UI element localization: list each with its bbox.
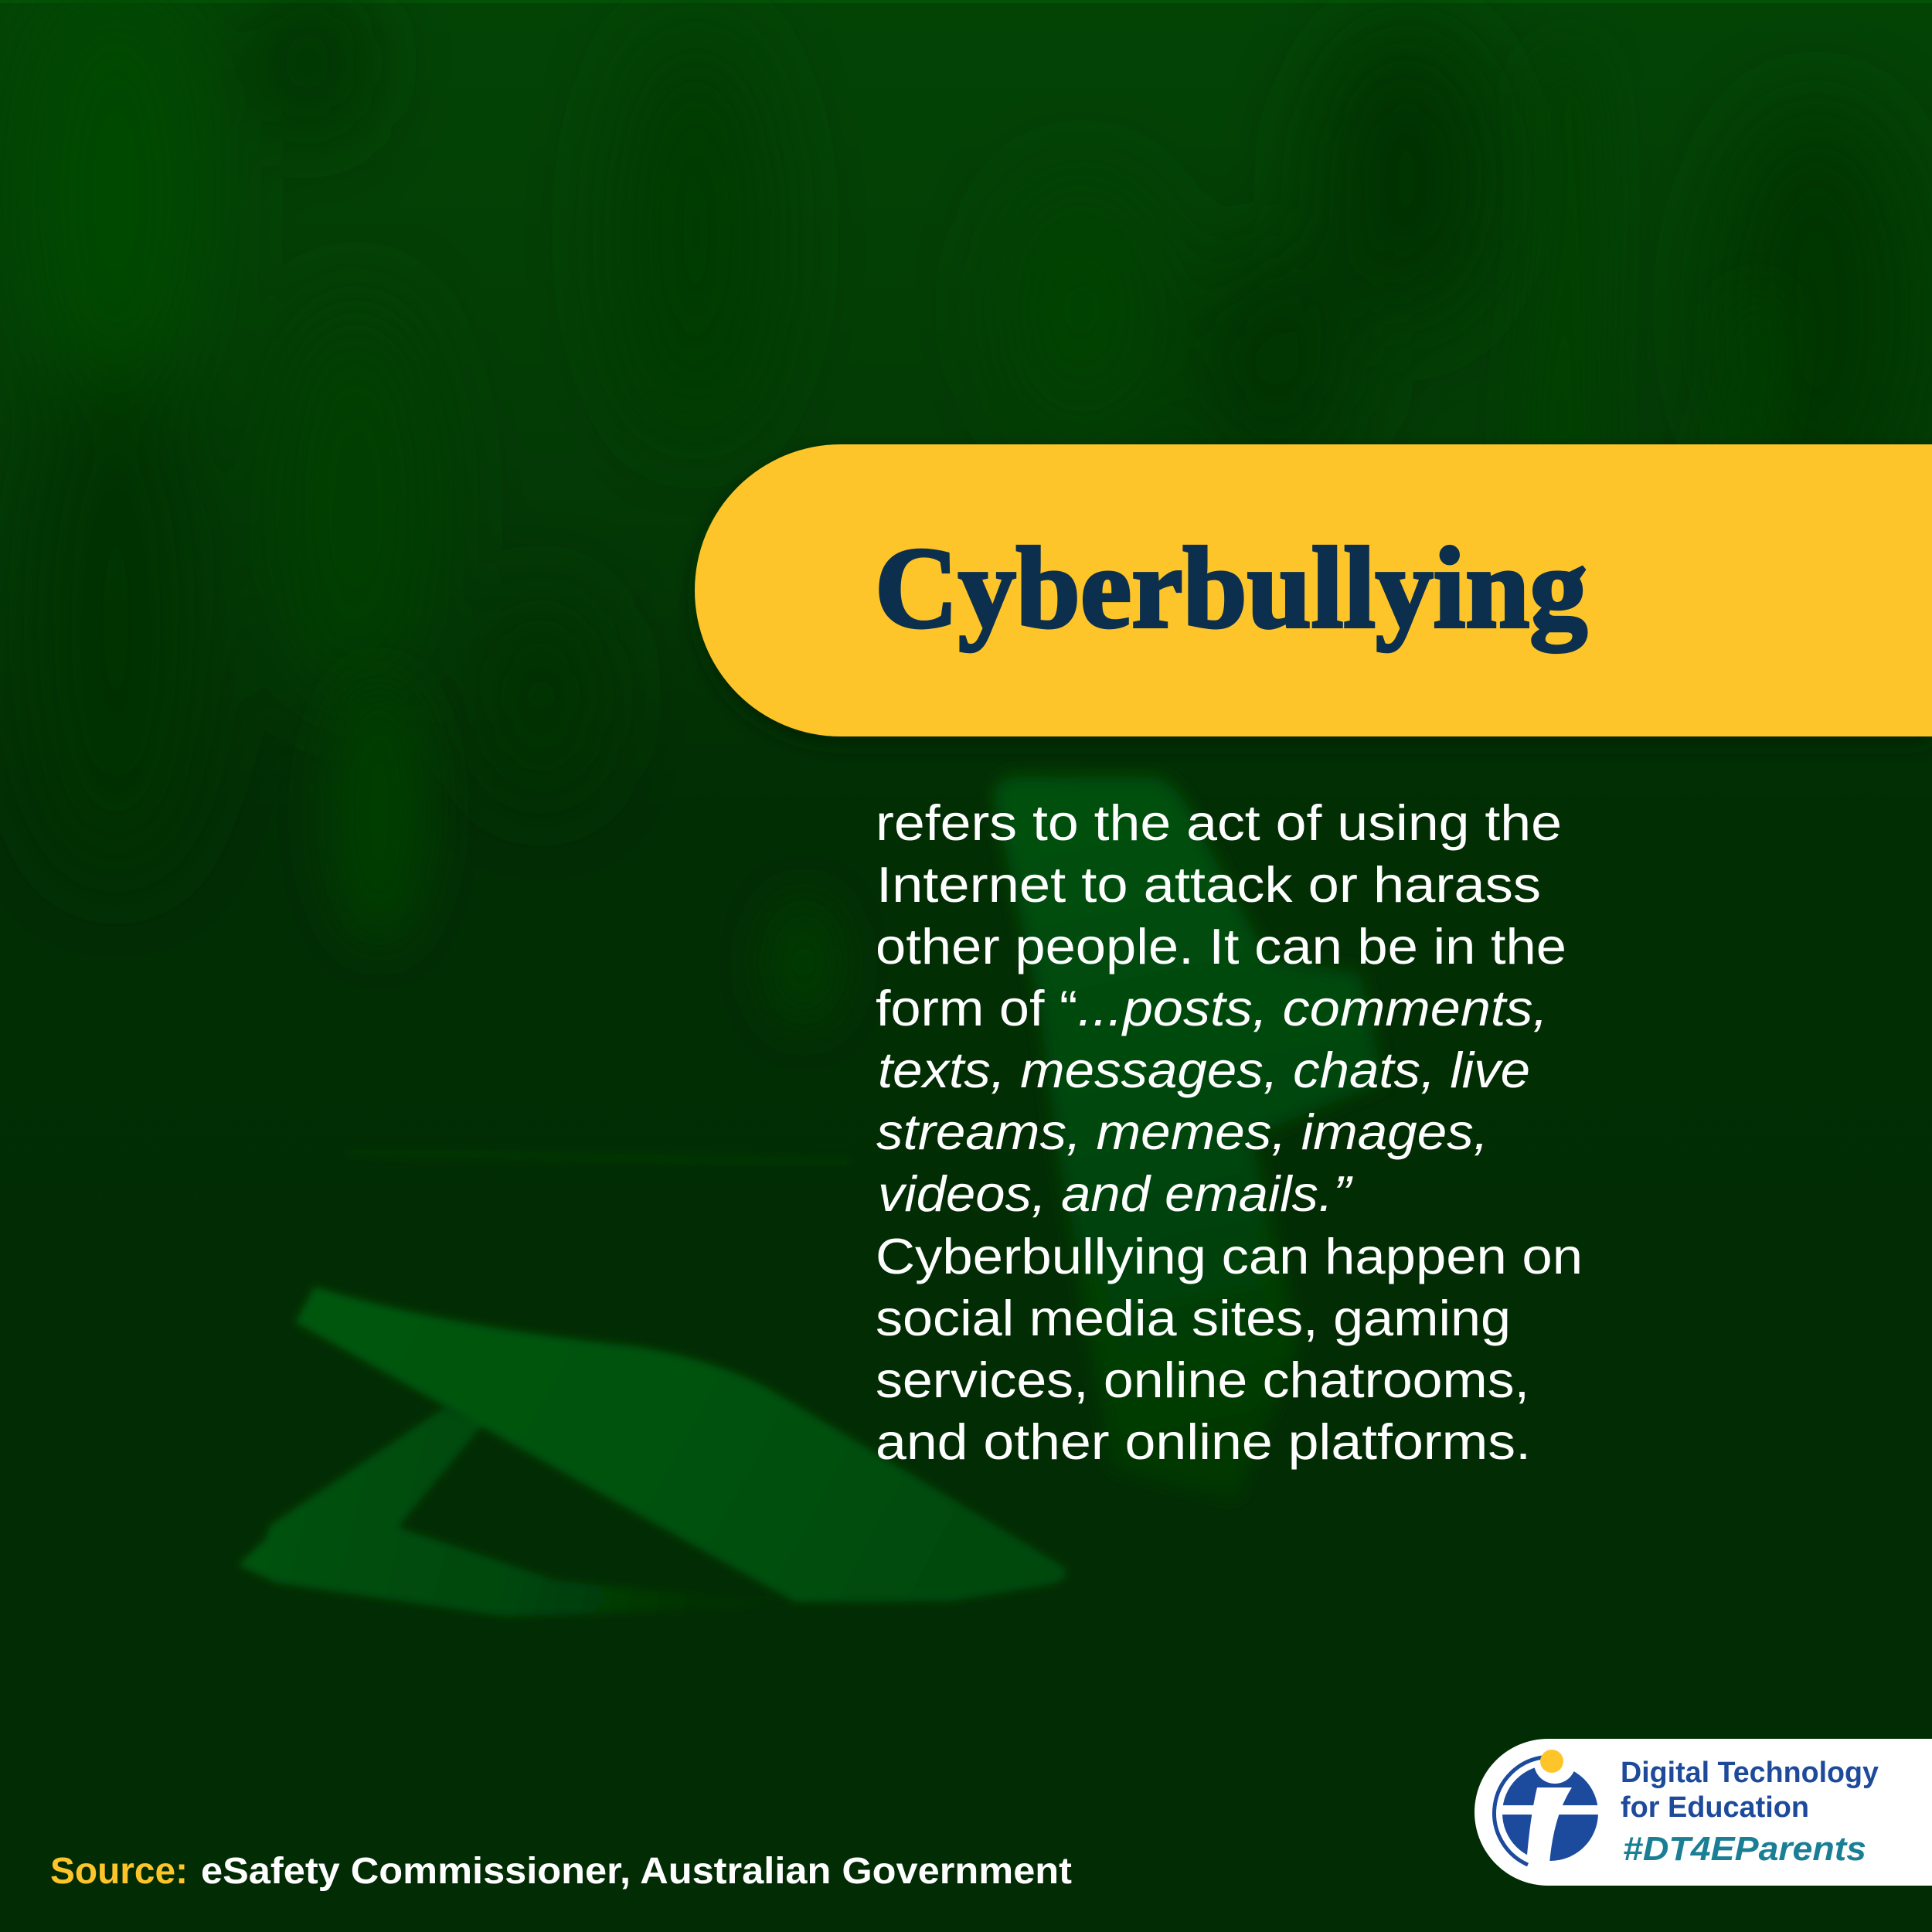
body paragraph: social media sites, gaming [876, 1290, 1511, 1346]
source line: eSafety Commissioner, Australian Government [201, 1851, 1072, 1892]
body paragraph: texts, messages, chats, live [878, 1042, 1530, 1098]
body paragraph: and other online platforms. [876, 1413, 1531, 1470]
logo text: Digital Technology [1621, 1757, 1879, 1789]
logo text [1621, 1757, 1879, 1868]
body paragraph: refers to the act of using the [876, 794, 1562, 851]
body paragraph: videos, and emails.” [878, 1165, 1354, 1222]
body paragraph: services, online chatrooms, [876, 1352, 1529, 1408]
logo panel [1475, 1739, 1932, 1886]
logo text: #DT4EParents [1623, 1830, 1866, 1868]
title: Cyberbullying [875, 524, 1587, 652]
title banner [695, 444, 1932, 736]
body paragraph: streams, memes, images, [876, 1104, 1488, 1160]
phone in hand [993, 777, 1383, 1499]
body paragraph: Internet to attack or harass [876, 856, 1541, 913]
body paragraph: other people. It can be in the [876, 918, 1566, 975]
logo text: for Education [1621, 1791, 1809, 1824]
body paragraph: Cyberbullying can happen on [876, 1228, 1583, 1284]
source line: Source: [50, 1851, 188, 1892]
body paragraph [876, 794, 1583, 1470]
laptop [238, 1287, 1066, 1617]
icon: DT4E logo [1495, 1742, 1601, 1865]
faint table edge [348, 1151, 850, 1163]
body paragraph: form of “ ...posts, comments, [876, 980, 1548, 1036]
